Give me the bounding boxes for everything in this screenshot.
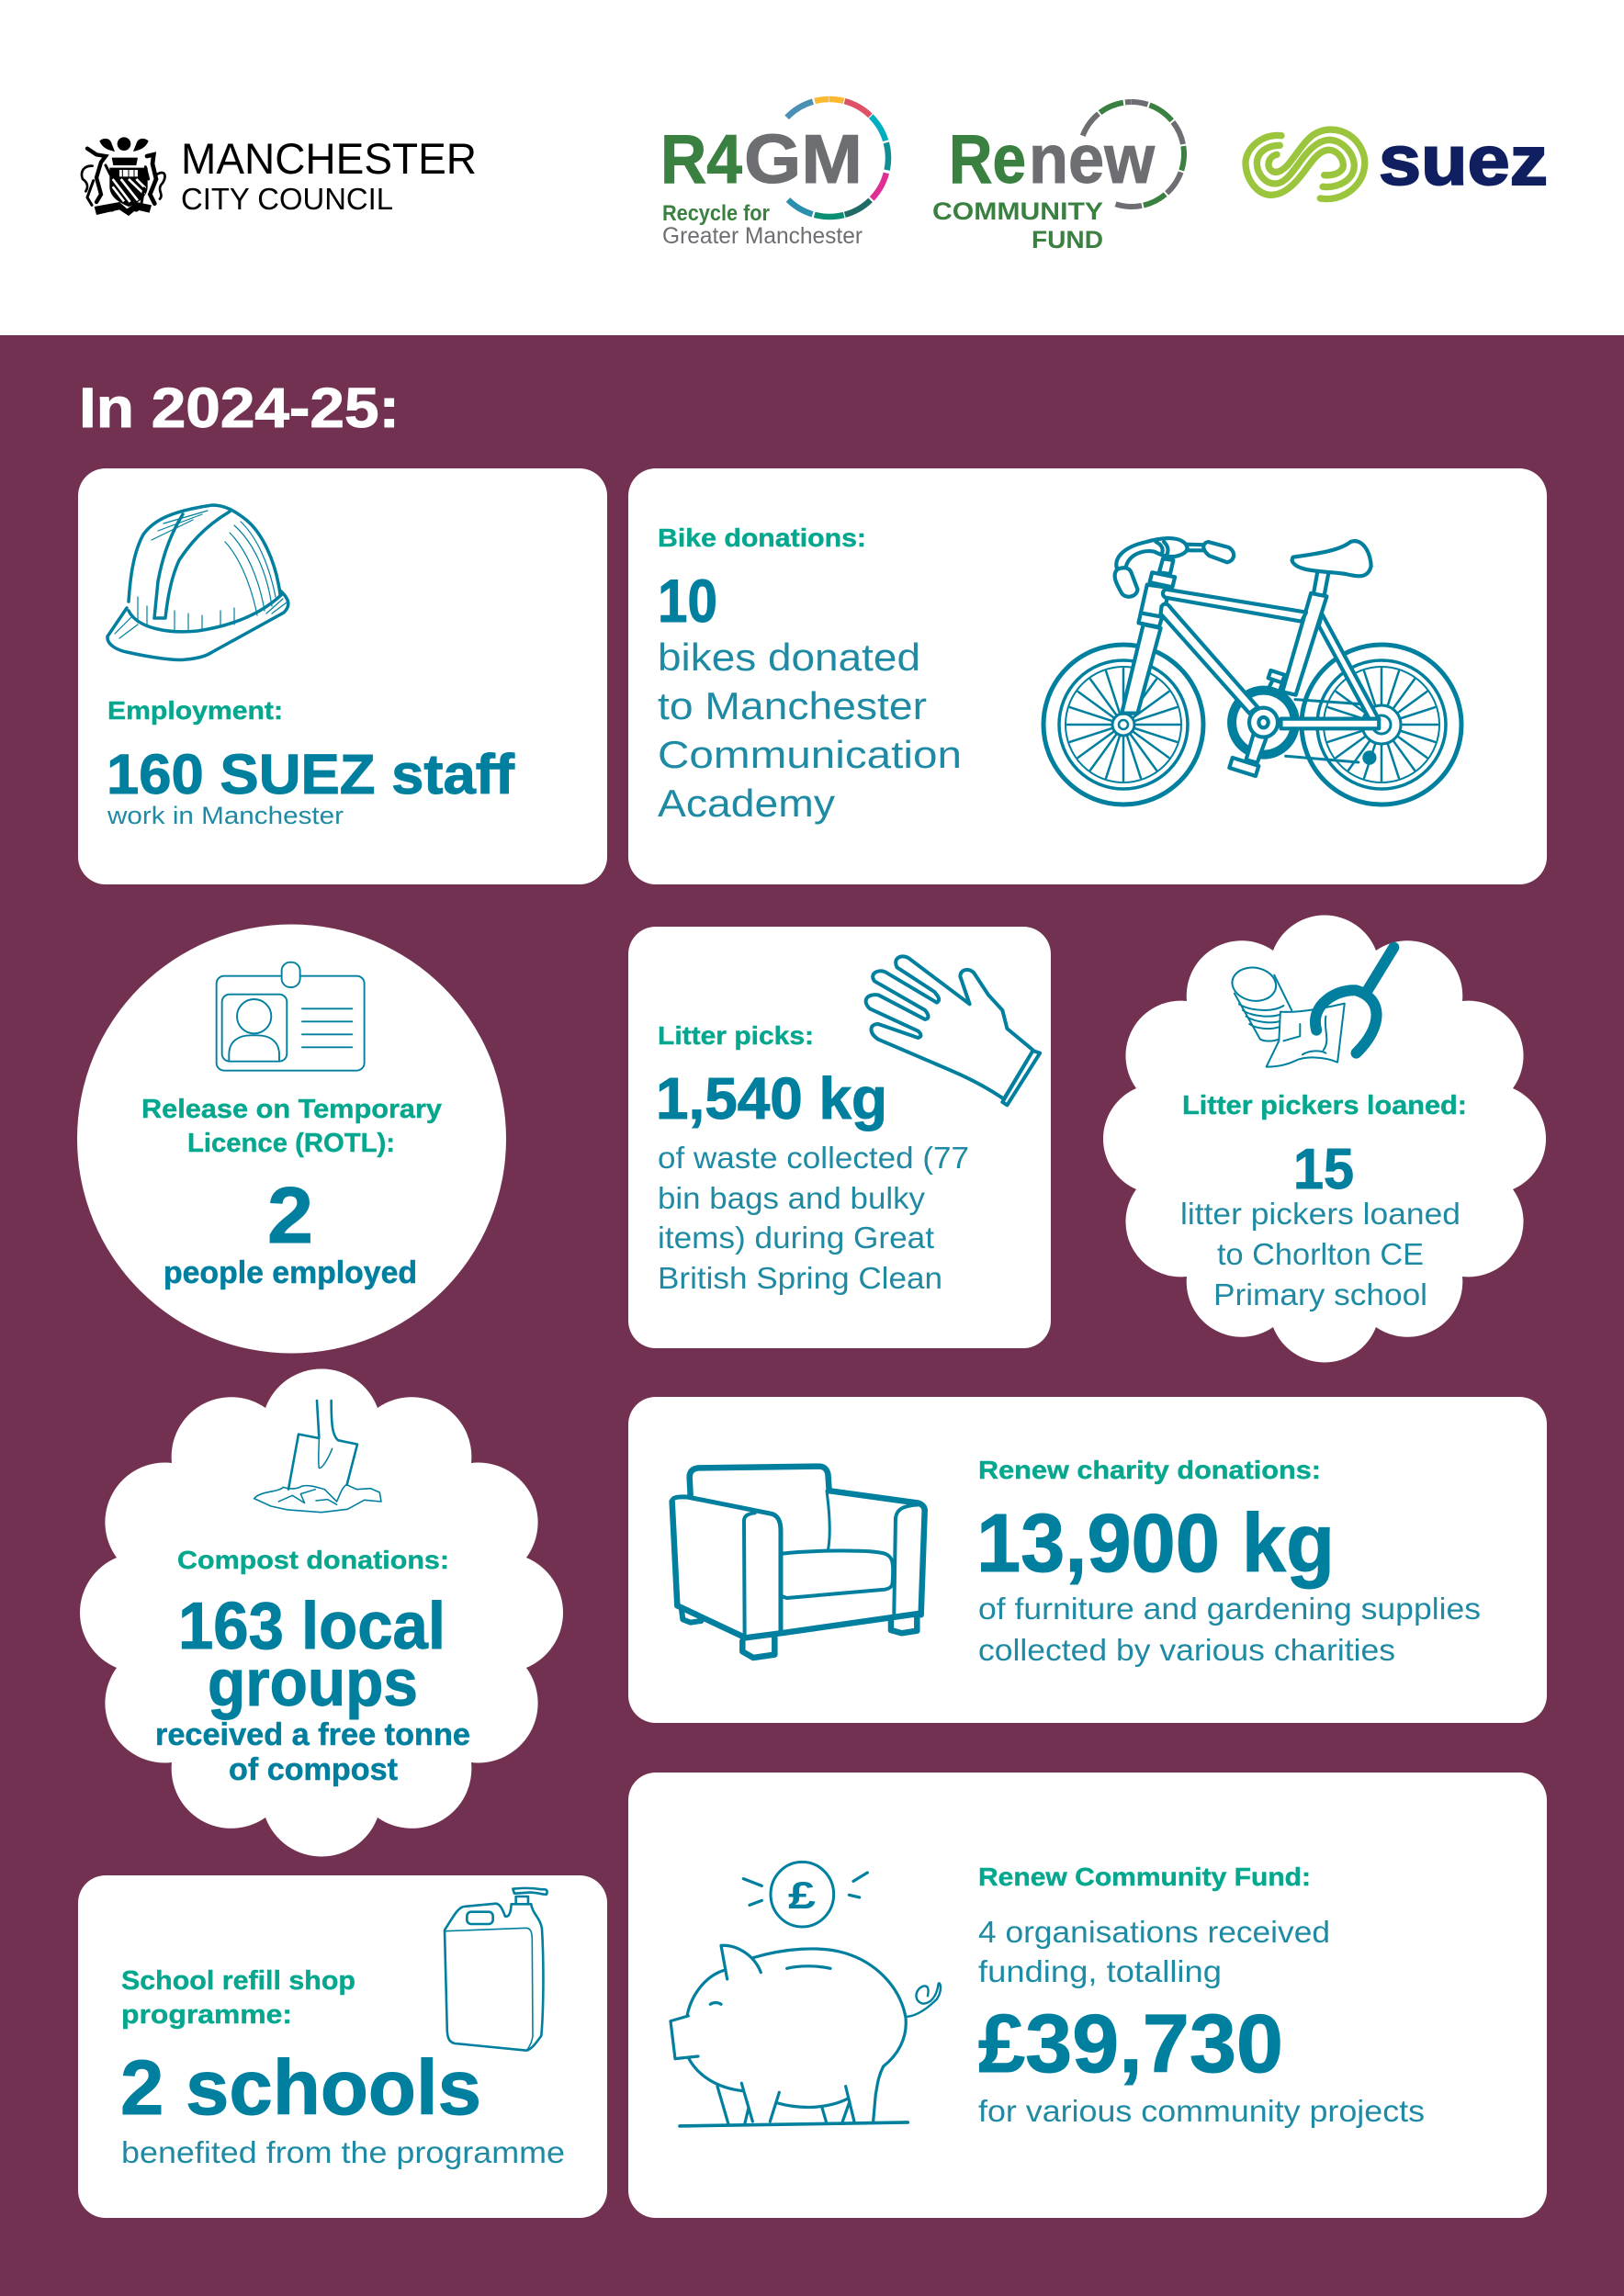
panel: employment <box>78 468 607 884</box>
intro text <box>978 1915 1330 1988</box>
description: Communication <box>658 733 962 776</box>
logo text: new: new <box>1029 120 1156 197</box>
stat: 15 <box>1293 1138 1354 1201</box>
panel: renew charity donations <box>628 1397 1547 1723</box>
logo text: suez: suez <box>1379 122 1548 200</box>
stat: 10 <box>658 567 717 635</box>
heading <box>141 1095 442 1158</box>
logo text: Greater Manchester: Greater Manchester <box>662 223 863 249</box>
logo: Manchester City Council <box>82 134 477 216</box>
heading: programme: <box>121 2000 292 2030</box>
stat: groups <box>208 1647 418 1720</box>
logo text: GM: GM <box>744 120 863 197</box>
heading: Employment: <box>107 696 283 725</box>
description: work in Manchester <box>107 802 344 829</box>
description: items) during Great <box>658 1221 934 1255</box>
description: received a free tonne <box>155 1717 470 1752</box>
panel: release on temporary licence <box>77 924 506 1354</box>
logo text: City Council: CITY COUNCIL <box>181 182 393 216</box>
logo: SUEZ <box>1246 122 1548 200</box>
panel: school refill shop <box>78 1875 607 2218</box>
description: of furniture and gardening supplies <box>978 1592 1481 1626</box>
heading: Bike donations: <box>658 523 866 552</box>
logo text: Fund: FUND <box>1032 226 1103 253</box>
heading: Release on Temporary <box>141 1095 442 1124</box>
intro text: 4 organisations received <box>978 1915 1330 1949</box>
panel: bike donations <box>628 468 1547 884</box>
heading: School refill shop <box>121 1966 355 1996</box>
description <box>658 636 962 825</box>
description: to Manchester <box>658 684 927 727</box>
stat <box>178 1590 445 1720</box>
description: people employed <box>164 1255 417 1290</box>
panel: compost donations <box>80 1368 563 1857</box>
panel: renew community fund <box>628 1773 1547 2218</box>
logo text: Recycle for: Recycle for <box>662 201 770 226</box>
panel: litter picks <box>628 927 1051 1348</box>
icon: hard hat <box>107 505 288 659</box>
coin symbol: £ <box>788 1874 816 1917</box>
description: of waste collected (77 <box>658 1141 969 1175</box>
icon: ID badge <box>217 962 365 1071</box>
stat: 1,540 kg <box>656 1065 887 1131</box>
icon: litter picker and rubbish <box>1226 948 1393 1067</box>
title: In 2024-25: <box>79 377 400 439</box>
description: British Spring Clean <box>658 1261 942 1295</box>
description: for various community projects <box>978 2094 1425 2128</box>
description <box>155 1717 470 1787</box>
stat: 13,900 kg <box>976 1498 1335 1590</box>
stat: 160 SUEZ staff <box>107 743 515 805</box>
ring segments <box>771 99 888 217</box>
logo text: R4: R4 <box>660 120 742 197</box>
icon: piggy bank with coin <box>671 1862 941 2126</box>
description: of compost <box>229 1752 398 1787</box>
description: bin bags and bulky <box>658 1181 926 1215</box>
heading: Compost donations: <box>177 1546 449 1574</box>
stat: £39,730 <box>978 1998 1283 2090</box>
stat: 2 schools <box>120 2044 481 2131</box>
icon: bicycle <box>1043 538 1461 805</box>
icon: glove <box>866 956 1040 1105</box>
heading: Litter picks: <box>658 1021 814 1050</box>
icon: coat of arms <box>82 137 165 216</box>
icon: spade in soil <box>254 1401 381 1513</box>
heading: Licence (ROTL): <box>187 1129 395 1158</box>
heading: Renew Community Fund: <box>978 1863 1311 1891</box>
description: to Chorlton CE <box>1217 1237 1424 1271</box>
logo: R4GM <box>660 99 888 249</box>
heading: Renew charity donations: <box>978 1456 1321 1484</box>
description <box>978 1592 1481 1667</box>
description: Primary school <box>1213 1277 1427 1311</box>
logo text: Re: Re <box>949 120 1026 197</box>
logo text: Manchester: MANCHESTER <box>181 134 477 183</box>
description: collected by various charities <box>978 1633 1395 1667</box>
stat: 163 local <box>178 1590 445 1663</box>
description: Academy <box>658 782 835 825</box>
icon: SUEZ spiral <box>1246 129 1365 199</box>
icon: refill container <box>445 1888 547 2051</box>
logo: Renew Community Fund <box>932 102 1184 253</box>
description: benefited from the programme <box>121 2135 565 2169</box>
description: bikes donated <box>658 636 920 679</box>
intro text: funding, totalling <box>978 1954 1222 1988</box>
ring segments <box>1079 102 1184 207</box>
heading: Litter pickers loaned: <box>1182 1091 1467 1120</box>
description <box>1180 1197 1460 1311</box>
logo text: Community: COMMUNITY <box>932 197 1103 225</box>
heading <box>121 1966 355 2030</box>
description: litter pickers loaned <box>1180 1197 1460 1231</box>
description <box>658 1141 969 1295</box>
stat: 2 <box>267 1172 313 1260</box>
icon: armchair <box>672 1467 925 1658</box>
panel: litter pickers loaned <box>1103 916 1546 1362</box>
